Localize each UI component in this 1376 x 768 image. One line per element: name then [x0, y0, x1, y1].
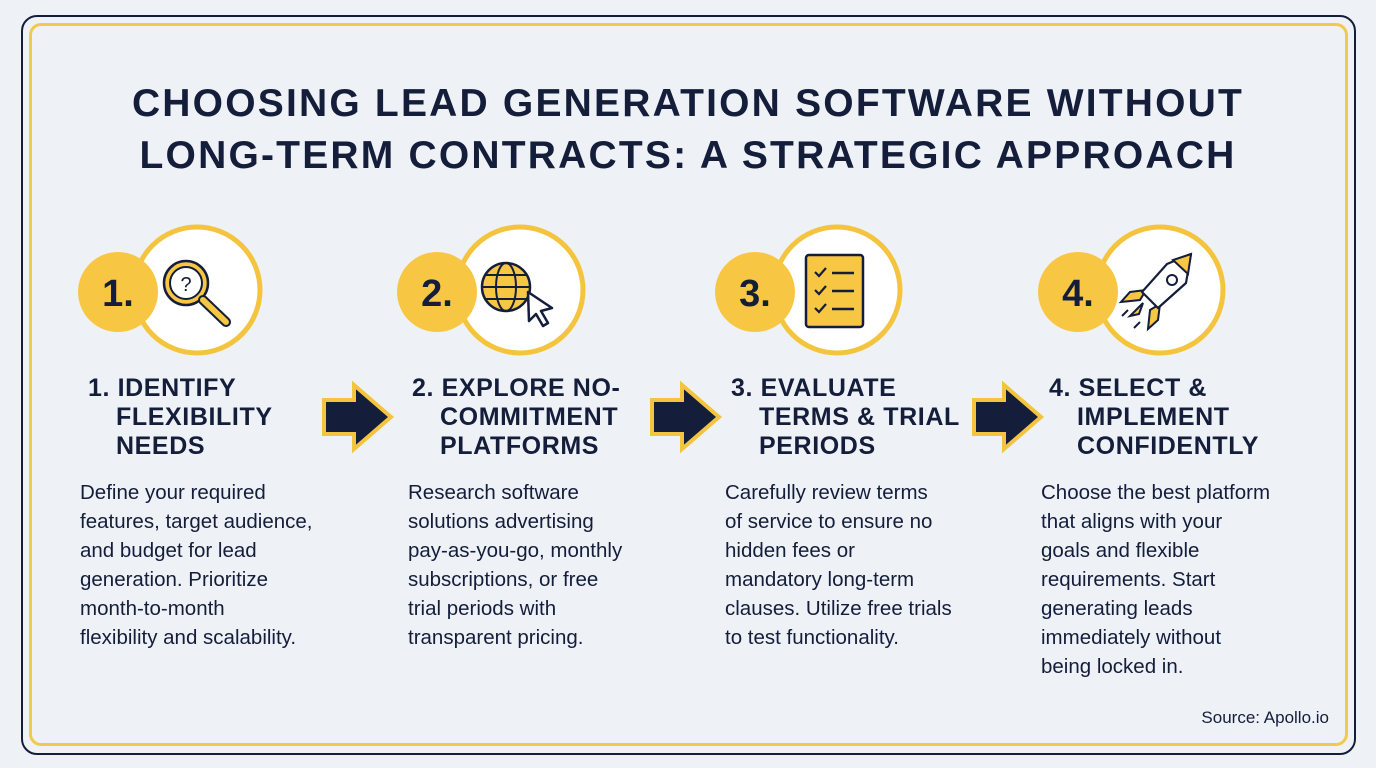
body 1: Define your required [80, 481, 266, 504]
title [132, 82, 1244, 177]
body 2: transparent pricing. [408, 626, 583, 649]
body 1: generation. Prioritize [80, 568, 268, 591]
body 4 [1041, 481, 1270, 678]
body 4: requirements. Start [1041, 568, 1215, 591]
heading 3: 3. EVALUATE [731, 374, 896, 402]
body 4: that aligns with your [1041, 510, 1222, 533]
heading 4: CONFIDENTLY [1077, 432, 1259, 460]
step 2 badge: 2. [421, 273, 453, 315]
heading 4: IMPLEMENT [1077, 403, 1230, 431]
heading 4: 4. SELECT & [1049, 374, 1207, 402]
step 4 badge [1038, 227, 1223, 353]
heading 2 [412, 374, 620, 460]
step 3 badge [715, 227, 900, 353]
heading 1: NEEDS [116, 432, 205, 460]
heading 2: 2. EXPLORE NO- [412, 374, 620, 402]
heading 1: 1. IDENTIFY [88, 374, 236, 402]
body 2: trial periods with [408, 597, 556, 620]
body 3: hidden fees or [725, 539, 855, 562]
body 3: of service to ensure no [725, 510, 932, 533]
arrow 3 [974, 385, 1041, 449]
body 3: Carefully review terms [725, 481, 928, 504]
heading 3 [731, 374, 960, 460]
body 1: and budget for lead [80, 539, 257, 562]
step 1 badge: ? [180, 274, 192, 296]
heading 2: COMMITMENT [440, 403, 618, 431]
title: CHOOSING LEAD GENERATION SOFTWARE WITHOUT [132, 82, 1244, 125]
arrow 1 [324, 385, 391, 449]
body 4: generating leads [1041, 597, 1193, 620]
heading 1: FLEXIBILITY [116, 403, 273, 431]
heading 4 [1049, 374, 1259, 460]
step 2 badge [397, 227, 583, 353]
body 1 [80, 481, 312, 649]
body 1: month-to-month [80, 597, 225, 620]
body 4: being locked in. [1041, 655, 1183, 678]
body 4: goals and flexible [1041, 539, 1199, 562]
body 3 [725, 481, 952, 649]
body 2: solutions advertising [408, 510, 594, 533]
heading 2: PLATFORMS [440, 432, 599, 460]
heading 1 [88, 374, 273, 460]
body 2 [408, 481, 622, 649]
step 1 badge: 1. [102, 273, 134, 315]
heading 3: PERIODS [759, 432, 876, 460]
source: Source: Apollo.io [1201, 708, 1329, 727]
body 4: Choose the best platform [1041, 481, 1270, 504]
heading 3: TERMS & TRIAL [759, 403, 960, 431]
body 4: immediately without [1041, 626, 1221, 649]
arrow 2 [652, 385, 719, 449]
body 1: features, target audience, [80, 510, 312, 533]
body 2: pay-as-you-go, monthly [408, 539, 622, 562]
body 3: clauses. Utilize free trials [725, 597, 952, 620]
body 1: flexibility and scalability. [80, 626, 296, 649]
step 4 badge: 4. [1062, 273, 1094, 315]
step 1 badge [78, 227, 260, 353]
body 2: Research software [408, 481, 579, 504]
title: LONG-TERM CONTRACTS: A STRATEGIC APPROACH [140, 134, 1236, 177]
step 3 badge: 3. [739, 273, 771, 315]
body 3: mandatory long-term [725, 568, 914, 591]
body 3: to test functionality. [725, 626, 899, 649]
body 2: subscriptions, or free [408, 568, 598, 591]
